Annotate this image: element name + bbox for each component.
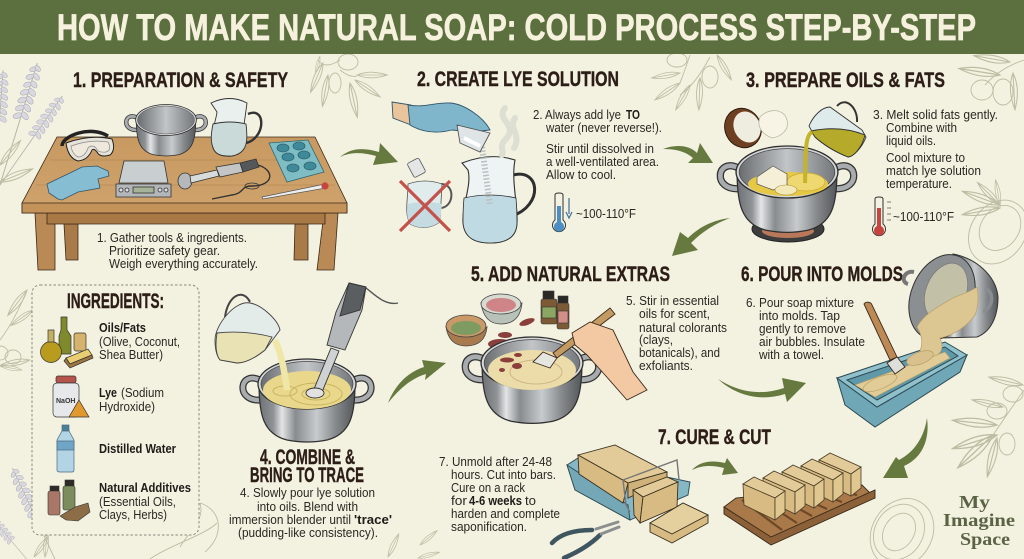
text: step 4 — [229, 485, 392, 540]
header banner — [0, 0, 1024, 54]
illustration: pitcher pouring olive oil — [805, 102, 866, 183]
text: ingredient list: Lye — [99, 385, 117, 400]
illustration: crossed-out pitcher — [400, 158, 451, 231]
text: step 1: Weigh everything accurately. — [109, 256, 258, 271]
text: ingredient list: (Sodium — [121, 385, 164, 400]
text: step 7: harden and complete — [451, 506, 560, 521]
text: ingredient list: Clays, Herbs) — [99, 507, 167, 522]
panel: ingredients — [32, 285, 199, 535]
text: ingredient list: Hydroxide) — [99, 399, 155, 414]
panel: step 1 preparation and safety — [22, 69, 347, 271]
arrow: mold to rack — [692, 458, 738, 475]
coconut bottom — [857, 487, 947, 559]
temperature label: ~100-110°F — [893, 209, 954, 224]
text: step 2: TO — [626, 107, 640, 122]
icon: silicone soap mold — [269, 140, 324, 182]
text: step 5: exfoliants. — [639, 358, 693, 373]
icon: natural additives — [48, 480, 90, 521]
text: step 4: immersion blender until — [229, 512, 351, 527]
temperature label: ~100-110°F — [576, 206, 636, 221]
text: step 5: 5. Stir in essential — [626, 293, 719, 308]
olive sprig before step 3 — [673, 54, 734, 111]
lavender bottom left — [0, 465, 67, 559]
arrow: step 1 to step 2 — [340, 143, 398, 165]
olive sprig lower right — [951, 374, 1024, 478]
text: step 5 — [626, 293, 727, 373]
text: step 4: (pudding-like consistency). — [238, 525, 378, 540]
panel: step 4 combine and bring to trace — [215, 283, 398, 540]
olive sprig left — [0, 288, 34, 372]
icon: digital scale — [116, 161, 171, 197]
icon: steam — [502, 108, 517, 155]
text: step 2: water (never reverse!). — [545, 120, 662, 135]
coconut upper right — [956, 179, 1024, 275]
text: step 7: for — [451, 493, 468, 508]
panel: step 7 cure and cut — [439, 426, 875, 558]
text: step 5: oils for scent, — [639, 306, 710, 321]
illustration: pot with botanicals — [465, 337, 599, 423]
heading: step 2: 2. CREATE LYE SOLUTION — [417, 68, 619, 91]
heading: step 3: 3. PREPARE OILS & FATS — [746, 69, 945, 92]
heading: step 4: 4. COMBINE & — [260, 446, 355, 469]
text: step 6: into molds. Tap — [759, 308, 840, 323]
text: step 3: 3. Melt solid fats gently. — [873, 107, 998, 122]
text: step 3: Cool mixture to — [886, 150, 965, 165]
text: ingredient list — [99, 320, 191, 522]
small leaves lower middle — [386, 529, 440, 559]
text: step 7: saponification. — [451, 519, 527, 534]
olive sprig beside step 1 heading — [308, 56, 341, 107]
heading: ingredients: INGREDIENTS: — [67, 290, 164, 313]
text: step 3: match lye solution — [886, 163, 981, 178]
logo: My Imagine Space: Imagine — [943, 510, 1015, 530]
illustration: gloved hand pouring lye — [392, 102, 490, 152]
text: step 5: natural colorants — [639, 320, 727, 335]
text: ingredient list: Oils/Fats — [99, 320, 146, 335]
olive sprig beside step 2 heading — [338, 54, 387, 118]
illustration: soap bars on wooden rack — [724, 453, 875, 545]
icon: oils and fats — [40, 317, 93, 368]
illustration: spatula — [864, 302, 905, 374]
text: ingredient list: Shea Butter) — [99, 347, 163, 362]
icon: pot — [126, 104, 206, 156]
text: ingredient list: Distilled Water — [99, 441, 176, 456]
text: step 6: 6. Pour soap mixture — [746, 295, 854, 310]
text: ingredient list: (Olive, Coconut, — [99, 334, 180, 349]
coconut behind ingredients — [150, 503, 218, 559]
text: step 4: into oils. Blend with — [257, 499, 358, 514]
text: ingredient list: Natural Additives — [99, 480, 191, 495]
icon: lye jar — [53, 376, 89, 417]
icon: water jug — [211, 98, 261, 156]
panel: step 2 create lye solution — [392, 68, 662, 243]
panel: step 5 add natural extras — [446, 263, 727, 423]
illustration: immersion blender — [306, 283, 398, 398]
panel: step 6 pour into molds — [741, 245, 998, 427]
logo: My Imagine Space: Space — [960, 529, 1010, 549]
arrow: step 5 to step 6 — [718, 378, 806, 402]
text: step 6 — [746, 295, 865, 362]
olive sprig after step 2 — [651, 53, 690, 102]
illustration: coconut half — [718, 102, 768, 154]
text: step 2: a well-ventilated area. — [546, 154, 659, 169]
olive sprig top right — [958, 52, 1024, 110]
logo: My Imagine Space: My — [959, 492, 990, 512]
text: step 3: Combine with — [886, 120, 957, 135]
illustration: wooden table — [22, 137, 347, 270]
illustration: pouring jug — [215, 295, 287, 390]
heading: step 5: 5. ADD NATURAL EXTRAS — [471, 263, 670, 286]
illustration: pot with soap batter — [243, 359, 371, 442]
text: step 7: Cure on a rack — [451, 480, 525, 495]
text: ingredient list: (Essential Oils, — [99, 494, 176, 509]
icon: safety goggles — [62, 131, 114, 161]
heading: step 7: 7. CURE & CUT — [658, 426, 771, 449]
arrow: step 2 to step 3 — [663, 143, 713, 163]
icon: pliers — [552, 522, 619, 558]
icon: water bottle — [57, 425, 74, 472]
illustration: burner — [752, 216, 824, 242]
text: step 4: 4. Slowly pour lye solution — [240, 485, 375, 500]
heading: step 1: 1. PREPARATION & SAFETY — [73, 69, 288, 92]
logo: My Imagine Space — [943, 492, 1015, 549]
text: step 7: hours. Cut into bars. — [451, 467, 556, 482]
heading: step 6: 6. POUR INTO MOLDS — [741, 263, 903, 286]
text: step 3 — [873, 107, 998, 191]
text: step 7: 7. Unmold after 24-48 — [439, 454, 552, 469]
icon: blue glove — [47, 166, 109, 200]
panel: step 3 prepare oils and fats — [718, 69, 998, 242]
illustration: blue loaf mold with batter — [837, 342, 967, 427]
illustration: pot with melting oils — [720, 146, 854, 232]
lavender top left — [0, 60, 69, 189]
icon: pink clay bowl — [481, 294, 522, 324]
text: step 2 — [533, 107, 662, 182]
text: step 3: temperature. — [886, 176, 952, 191]
text: step 2: 2. Always add lye — [533, 107, 621, 122]
text: step 1: 1. Gather tools & ingredients. — [97, 230, 247, 245]
text: step 5: (clays, — [639, 332, 673, 347]
text: step 1 — [97, 230, 258, 271]
heading: step 4 — [250, 446, 364, 487]
text: step 7: to — [525, 493, 536, 508]
icon: dried botanicals — [488, 316, 536, 349]
illustration: big water pitcher — [462, 157, 535, 243]
icon: green clay bowl — [446, 315, 487, 346]
illustration: shea butter — [759, 111, 788, 138]
text: step 3: liquid oils. — [886, 133, 936, 148]
text: step 5: botanicals), and — [639, 345, 720, 360]
arrow: step 4 to step 5 — [388, 360, 446, 403]
illustration: tilted pot pouring batter — [897, 245, 998, 368]
text: step 6: with a towel. — [758, 347, 824, 362]
icon: immersion blender — [178, 159, 270, 199]
text: step 1: Prioritize safety gear. — [109, 243, 220, 258]
text: step 6: gently to remove — [759, 321, 846, 336]
illustration: hand with spatula — [533, 308, 647, 400]
icon: red thermometer — [873, 197, 891, 236]
icon: falling lye crystals — [482, 147, 490, 205]
icon: thermometer — [262, 182, 329, 199]
icon: lye jar: NaOH — [56, 398, 75, 405]
text: step 7: 4-6 weeks — [469, 493, 522, 508]
arrow: step 3 to step 4 — [672, 218, 730, 256]
heading: step 4: BRING TO TRACE — [250, 464, 364, 487]
icon: essential oil bottles — [541, 291, 569, 329]
text: step 6: air bubbles. Insulate — [759, 334, 865, 349]
illustration: mold with loaf and wire cutter — [567, 445, 708, 543]
text: step 7 — [439, 454, 560, 534]
text: step 2: Allow to cool. — [546, 167, 616, 182]
arrow: step 6 to step 7 — [883, 418, 928, 478]
text: step 4: 'trace' — [354, 512, 392, 527]
icon: blue thermometer with down arrow — [553, 193, 572, 232]
text: step 2: Stir until dissolved in — [546, 141, 654, 156]
